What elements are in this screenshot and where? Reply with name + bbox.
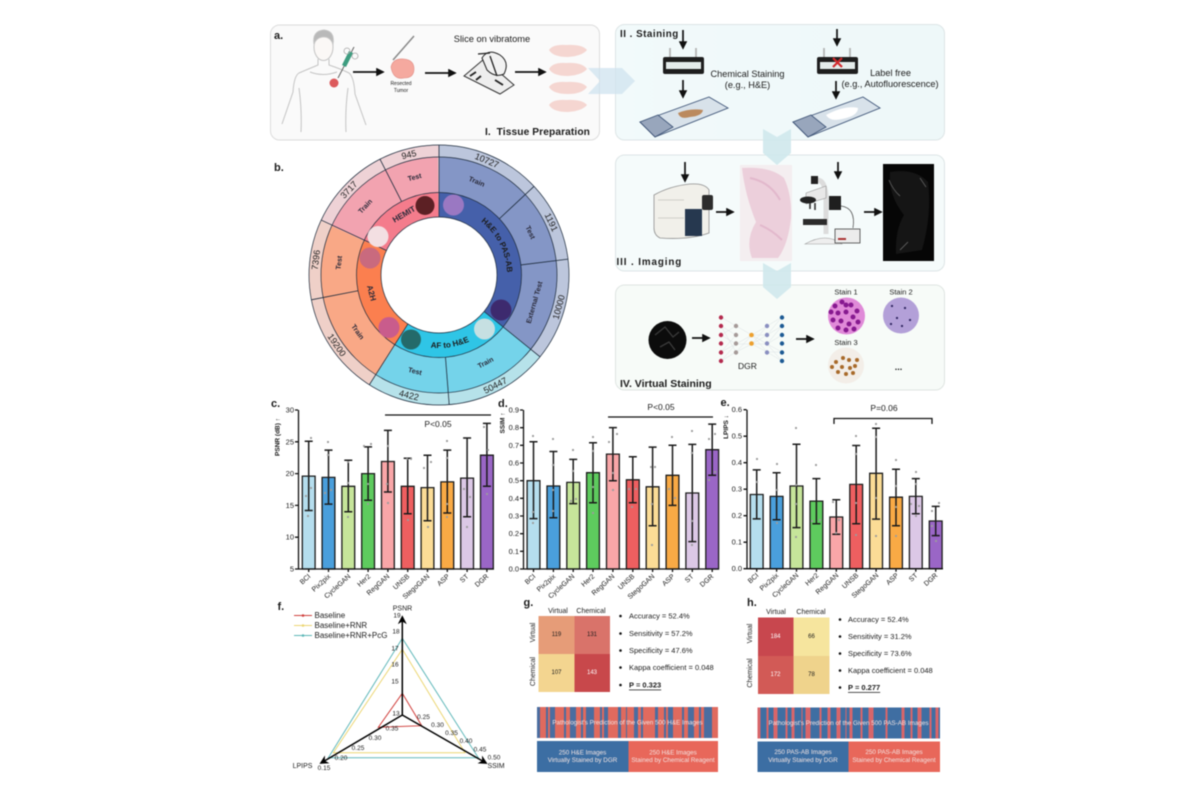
metrics: H&E: Sensitivity = 57.2% bbox=[629, 629, 693, 638]
heatmap: PAS-AB confusion matrix: Virtual bbox=[766, 609, 786, 616]
tick labels: radar: 19 bbox=[393, 612, 401, 620]
labels: split names: External Test bbox=[526, 280, 545, 324]
method labels: PSNR: Her2 bbox=[356, 573, 372, 589]
diagram: DGR network bbox=[719, 315, 784, 371]
metrics: H&E bbox=[619, 612, 714, 690]
method labels: PSNR: ST bbox=[459, 573, 471, 584]
tick labels: LPIPS: 0.1 bbox=[732, 538, 742, 547]
icon: resected tumor bbox=[390, 36, 414, 94]
icon: vibratome bbox=[464, 52, 514, 94]
tick labels: SSIM: 0.7 bbox=[509, 441, 519, 450]
heatmap: PAS-AB confusion matrix: Chemical bbox=[796, 609, 826, 616]
method labels: SSIM: Pix2pix bbox=[536, 573, 558, 594]
significance: LPIPS: P=0.06 bbox=[870, 403, 898, 413]
tick labels: PSNR: 15 bbox=[286, 501, 294, 510]
tick labels: LPIPS: 0.5 bbox=[732, 432, 742, 441]
tick labels: radar: 0.25 bbox=[417, 714, 430, 721]
strip: ground truth H&E: Stained by Chemical Reagent bbox=[631, 757, 715, 764]
method labels: SSIM: StegoGAN bbox=[627, 573, 656, 601]
axes: SSIM bbox=[520, 410, 719, 572]
error bars: LPIPS bbox=[753, 428, 940, 536]
axes: LPIPS bbox=[744, 410, 943, 572]
labels: image counts: 1191 bbox=[543, 211, 560, 233]
metrics: H&E: Kappa coefficient = 0.048 bbox=[629, 663, 714, 672]
method labels: PSNR: CycleGAN bbox=[323, 573, 352, 600]
group: label free: Label free bbox=[870, 68, 911, 78]
labels: task names: AF to H&E bbox=[430, 336, 470, 349]
panel: PAS-AB evaluation bbox=[747, 609, 940, 772]
icon: slide scanner bbox=[654, 184, 713, 238]
method labels: SSIM bbox=[524, 573, 715, 601]
labels: split names: Test bbox=[407, 173, 423, 183]
axis names: radar: LPIPS bbox=[293, 763, 313, 770]
heatmap: H&E confusion matrix: 119 bbox=[552, 632, 562, 638]
tick labels: SSIM: 0.3 bbox=[509, 512, 519, 520]
labels: image counts: 4422 bbox=[398, 388, 420, 403]
data points: LPIPS bbox=[757, 424, 939, 541]
strip: pathologist prediction H&E: Pathologist's Prediction of the Given 500 H&E Images bbox=[552, 720, 703, 726]
method labels: LPIPS: RegGAN bbox=[815, 572, 840, 596]
image: stain 2: Stain 2 bbox=[889, 288, 913, 296]
method labels: SSIM: BCI bbox=[524, 573, 537, 586]
tick labels: radar bbox=[318, 612, 501, 772]
labels: split names: Test bbox=[335, 255, 344, 270]
heatmap: H&E confusion matrix: 107 bbox=[551, 670, 562, 676]
tick labels: LPIPS: 0.3 bbox=[732, 485, 742, 494]
strip: ground truth H&E: Virtually Stained by DGR bbox=[548, 757, 618, 764]
method labels: LPIPS: Pix2pix bbox=[759, 572, 781, 593]
labels: image counts: 50447 bbox=[482, 375, 509, 396]
significance: SSIM: P<0.05 bbox=[647, 402, 675, 412]
arrow: chevron II to III bbox=[763, 129, 791, 165]
icon: tissue slices bbox=[549, 45, 587, 112]
labels: split names: Train bbox=[358, 198, 374, 215]
heatmap: H&E confusion matrix: Virtual bbox=[530, 622, 537, 642]
method labels: SSIM: ST bbox=[684, 573, 696, 584]
panel label: d: d. bbox=[498, 398, 508, 410]
panel label: h: h. bbox=[747, 597, 757, 609]
panel label: b: b. bbox=[274, 162, 284, 174]
text: more stains: ... bbox=[895, 362, 902, 372]
heatmap: H&E confusion matrix: Chemical bbox=[530, 656, 537, 686]
ring: task band bbox=[369, 205, 509, 345]
metrics: PAS-AB: Kappa coefficient = 0.048 bbox=[848, 666, 933, 675]
error bars: SSIM bbox=[530, 424, 716, 542]
chart: SSIM bars bbox=[500, 402, 719, 601]
method labels: PSNR: UNSB bbox=[392, 573, 412, 592]
axis title: SSIM: SSIM ↑ bbox=[500, 413, 506, 433]
icon: patient torso bbox=[282, 30, 366, 132]
arrow: network to stains bbox=[796, 338, 813, 340]
strip: ground truth H&E bbox=[537, 741, 718, 772]
axis title: LPIPS: LPIPS ↓ bbox=[723, 415, 730, 439]
labels: image counts: 3717 bbox=[338, 179, 359, 201]
heading: imaging: III . Imaging bbox=[616, 257, 682, 268]
panel: virtual staining bbox=[616, 285, 944, 390]
labels: split names: Train bbox=[349, 323, 365, 341]
tick labels: PSNR: 25 bbox=[286, 438, 294, 446]
method labels: PSNR: DGR bbox=[474, 573, 490, 589]
tick labels: radar: 0.15 bbox=[318, 765, 331, 772]
tick labels: radar: 0.30 bbox=[431, 722, 444, 729]
tick labels: LPIPS: 0.6 bbox=[732, 405, 742, 414]
arrow: chevron a to II bbox=[588, 68, 635, 94]
tick labels: radar: 15 bbox=[391, 678, 399, 686]
image: stain 2 bbox=[883, 288, 919, 334]
metrics: PAS-AB: Sensitivity = 31.2% bbox=[848, 632, 912, 641]
metrics: H&E: Accuracy = 52.4% bbox=[629, 612, 690, 620]
axes: radar bbox=[321, 617, 486, 763]
metrics: H&E: P = 0.323 bbox=[629, 680, 661, 690]
chart: PSNR bars bbox=[274, 406, 494, 601]
method labels: SSIM: ASP bbox=[661, 573, 677, 588]
labels: split names: Test bbox=[524, 225, 536, 241]
method labels: SSIM: UNSB bbox=[617, 573, 637, 592]
tick labels: radar: 0.35 bbox=[445, 730, 458, 737]
metrics: PAS-AB bbox=[839, 615, 933, 692]
method labels: LPIPS: UNSB bbox=[841, 572, 861, 591]
tick labels: PSNR: 5 bbox=[290, 564, 294, 574]
tick labels: LPIPS bbox=[732, 405, 742, 573]
tick labels: SSIM: 0.5 bbox=[509, 476, 519, 485]
labels: split names: Train bbox=[467, 176, 486, 189]
tick labels: radar: 17 bbox=[391, 646, 399, 652]
error bars: PSNR bbox=[305, 423, 491, 521]
heatmap: PAS-AB confusion matrix: Virtual bbox=[747, 623, 754, 643]
tick labels: radar: 0.35 bbox=[386, 726, 399, 732]
heatmap: PAS-AB confusion matrix: 66 bbox=[808, 634, 815, 640]
strip: ground truth H&E: 250 H&E Images bbox=[649, 750, 697, 756]
image: autofluorescence tissue bbox=[883, 164, 934, 261]
tick labels: LPIPS: 0.0 bbox=[732, 564, 742, 573]
heatmap: PAS-AB confusion matrix bbox=[747, 609, 830, 694]
series: baseline bbox=[378, 693, 422, 727]
legend: radar: Baseline+RNR bbox=[314, 621, 367, 630]
method labels: LPIPS: ASP bbox=[885, 572, 901, 587]
labels: task names: H&E to PAS-AB bbox=[481, 217, 513, 273]
strip: ground truth PAS-AB: 250 PAS-AB Images bbox=[774, 749, 832, 756]
arrow: scanner to image bbox=[716, 211, 733, 213]
labels: task names bbox=[365, 204, 513, 349]
panel: H&E evaluation bbox=[530, 608, 718, 772]
method labels: SSIM: DGR bbox=[699, 573, 715, 589]
method labels: PSNR: StegoGAN bbox=[402, 573, 431, 601]
image: stain 3: Stain 3 bbox=[834, 338, 858, 347]
axis names: radar: SSIM bbox=[487, 763, 505, 770]
strip: pathologist prediction H&E bbox=[537, 707, 718, 738]
axis names: radar bbox=[293, 606, 505, 770]
data points: SSIM bbox=[533, 431, 715, 545]
heading: virtual staining: IV. Virtual Staining bbox=[620, 378, 712, 390]
method labels: LPIPS: StegoGAN bbox=[851, 572, 880, 600]
axis title: PSNR: PSNR (dB) ↑ bbox=[274, 418, 282, 456]
ring: split band bbox=[339, 175, 539, 375]
method labels: LPIPS: Her2 bbox=[804, 572, 820, 588]
chart: radar ablation bbox=[293, 606, 505, 772]
labels: image counts: 19200 bbox=[325, 332, 348, 358]
significance: PSNR bbox=[385, 415, 491, 429]
method labels: LPIPS: ST bbox=[908, 572, 920, 583]
group: chemical staining: (e.g., H&E) bbox=[725, 80, 770, 90]
heatmap: PAS-AB confusion matrix: 172 bbox=[770, 672, 781, 678]
tick labels: radar: 0.30 bbox=[369, 735, 382, 742]
heatmap: H&E confusion matrix: Chemical bbox=[576, 608, 606, 615]
heatmap: H&E confusion matrix: 131 bbox=[587, 632, 598, 638]
legend: radar: Baseline bbox=[314, 611, 346, 620]
panel label: e: e. bbox=[720, 397, 730, 409]
metrics: PAS-AB: Accuracy = 52.4% bbox=[848, 615, 909, 624]
image: stained tissue bbox=[740, 165, 792, 261]
metrics: PAS-AB: Specificity = 73.6% bbox=[848, 649, 912, 658]
labels: task names: HEMIT bbox=[391, 204, 417, 224]
metrics: PAS-AB: P = 0.277 bbox=[848, 683, 880, 692]
labels: split names: Test bbox=[407, 367, 423, 377]
labels: image counts: 10727 bbox=[473, 151, 500, 170]
strip: pathologist prediction PAS-AB: Pathologist's Prediction of the Given 500 PAS-AB Images bbox=[768, 720, 928, 727]
tick labels: radar: 0.20 bbox=[335, 755, 348, 762]
bars: LPIPS values bbox=[750, 473, 942, 569]
tick labels: radar: 0.50 bbox=[488, 754, 501, 762]
tick labels: PSNR: 10 bbox=[286, 532, 294, 542]
tick labels: radar: 16 bbox=[391, 662, 399, 668]
method labels: SSIM: Her2 bbox=[580, 573, 596, 589]
heatmap: H&E confusion matrix bbox=[530, 608, 610, 692]
heading: tissue preparation: I. Tissue Preparation bbox=[485, 127, 590, 138]
series: baseline+RNR+PcG bbox=[328, 638, 478, 758]
legend: radar bbox=[294, 611, 387, 640]
strip: ground truth PAS-AB bbox=[758, 742, 940, 772]
text: slice on vibratome: Slice on vibratome bbox=[454, 34, 530, 44]
method labels: SSIM: CycleGAN bbox=[547, 573, 576, 600]
significance: PSNR: P<0.05 bbox=[424, 419, 452, 429]
strip: ground truth H&E: 250 H&E Images bbox=[559, 750, 606, 756]
method labels: PSNR: Pix2pix bbox=[311, 573, 333, 594]
heatmap: H&E confusion matrix: Virtual bbox=[548, 608, 568, 615]
strip: ground truth PAS-AB: Stained by Chemical Reagent bbox=[852, 757, 936, 764]
tick labels: LPIPS: 0.2 bbox=[732, 511, 742, 520]
heading: staining: II . Staining bbox=[620, 29, 679, 40]
strip: ground truth PAS-AB: 250 PAS-AB Images bbox=[865, 749, 923, 756]
group: chemical staining: Chemical Staining bbox=[710, 69, 785, 79]
icon: fluorescence microscope bbox=[800, 176, 860, 244]
tick labels: SSIM: 0.0 bbox=[509, 564, 519, 574]
significance: LPIPS bbox=[834, 403, 932, 424]
tick labels: radar: 0.25 bbox=[352, 745, 365, 752]
heatmap: PAS-AB confusion matrix: Chemical bbox=[747, 658, 754, 688]
tick labels: radar: 13 bbox=[392, 710, 400, 718]
method labels: PSNR: RegGAN bbox=[366, 573, 391, 597]
arrow: microscope to image bbox=[864, 211, 881, 213]
data points: PSNR bbox=[306, 427, 488, 527]
tick labels: SSIM: 0.9 bbox=[509, 406, 519, 414]
method labels: PSNR: BCI bbox=[299, 573, 312, 586]
arrow: input to network bbox=[692, 337, 709, 339]
tick labels: SSIM: 0.2 bbox=[509, 529, 519, 538]
panel label: f: f. bbox=[278, 601, 284, 613]
panel: tissue preparation: a. bbox=[274, 30, 283, 42]
strip: ground truth PAS-AB: Virtually Stained by DGR bbox=[768, 757, 838, 764]
image: stain 1: Stain 1 bbox=[834, 288, 858, 296]
method labels: LPIPS: DGR bbox=[923, 572, 939, 588]
image: stain 3 bbox=[828, 338, 864, 384]
labels: task names: A2H bbox=[365, 284, 378, 302]
chart: dataset donut bbox=[308, 144, 570, 406]
bars: SSIM values bbox=[527, 450, 719, 569]
tick labels: radar: 0.45 bbox=[474, 746, 487, 754]
method labels: LPIPS: CycleGAN bbox=[771, 572, 800, 599]
chart: LPIPS bars bbox=[723, 403, 943, 600]
panel: staining bbox=[616, 24, 944, 140]
tick labels: LPIPS: 0.4 bbox=[732, 458, 742, 467]
image: stain 1 bbox=[828, 288, 865, 334]
panel label: g: g. bbox=[524, 597, 533, 609]
bars: PSNR values bbox=[302, 455, 493, 569]
group: label free bbox=[793, 29, 939, 137]
tick labels: SSIM: 0.8 bbox=[509, 423, 519, 432]
labels: image counts: 945 bbox=[400, 148, 418, 161]
method labels: PSNR bbox=[299, 573, 490, 601]
method labels: PSNR: ASP bbox=[436, 573, 452, 588]
labels: image counts: 7396 bbox=[310, 249, 322, 270]
tick labels: SSIM: 0.4 bbox=[509, 494, 519, 503]
heatmap: H&E confusion matrix: 143 bbox=[587, 670, 598, 676]
ring: outer counts band bbox=[315, 151, 563, 399]
tick labels: radar: 0.40 bbox=[460, 738, 473, 745]
icon: resected tumor: Resected bbox=[390, 81, 412, 87]
tick labels: SSIM: 0.6 bbox=[509, 458, 519, 468]
method labels: LPIPS: BCI bbox=[747, 572, 760, 585]
icon: biopsy syringe bbox=[330, 47, 358, 88]
series: baseline+RNR bbox=[333, 649, 465, 753]
icon: resected tumor: Tumor bbox=[394, 88, 408, 94]
labels: image counts bbox=[310, 148, 567, 403]
strip: pathologist prediction PAS-AB bbox=[758, 708, 940, 738]
labels: image counts: 10000 bbox=[551, 294, 567, 320]
thumbnails: tissue samples bbox=[360, 194, 512, 350]
tick labels: SSIM bbox=[509, 406, 519, 574]
arrow: to slices bbox=[515, 71, 545, 73]
metrics: H&E: Specificity = 47.6% bbox=[629, 646, 693, 655]
method labels: SSIM: RegGAN bbox=[591, 573, 616, 597]
group: label free: (e.g., Autofluorescence) bbox=[841, 79, 939, 89]
tick labels: PSNR: 30 bbox=[286, 406, 294, 414]
icon: input autofluorescence circle bbox=[648, 321, 686, 359]
axes: PSNR bbox=[295, 410, 494, 572]
tick labels: SSIM: 0.1 bbox=[509, 547, 519, 556]
panel label: c: c. bbox=[271, 398, 280, 410]
diagram: DGR network: DGR bbox=[738, 361, 757, 371]
arrow: to tumor bbox=[353, 71, 383, 73]
axis names: radar: PSNR bbox=[393, 606, 412, 612]
arrow: into microscope bbox=[837, 162, 839, 178]
tick labels: PSNR: 20 bbox=[286, 469, 294, 478]
labels: split names: Train bbox=[477, 356, 495, 370]
heatmap: PAS-AB confusion matrix: 184 bbox=[770, 634, 781, 640]
arrow: into scanner bbox=[684, 162, 686, 181]
legend: radar: Baseline+RNR+PcG bbox=[314, 631, 387, 640]
panel: tissue preparation bbox=[270, 25, 600, 140]
heatmap: PAS-AB confusion matrix: 78 bbox=[808, 672, 815, 678]
panel: imaging bbox=[616, 155, 944, 271]
method labels: LPIPS bbox=[747, 572, 939, 600]
tick labels: PSNR bbox=[286, 406, 294, 574]
tick labels: radar: 18 bbox=[392, 628, 400, 636]
arrow: chevron III to IV bbox=[763, 263, 791, 299]
significance: SSIM bbox=[608, 402, 713, 417]
labels: split names bbox=[335, 173, 545, 377]
arrow: to vibratome bbox=[425, 72, 455, 74]
group: chemical staining bbox=[640, 30, 785, 137]
